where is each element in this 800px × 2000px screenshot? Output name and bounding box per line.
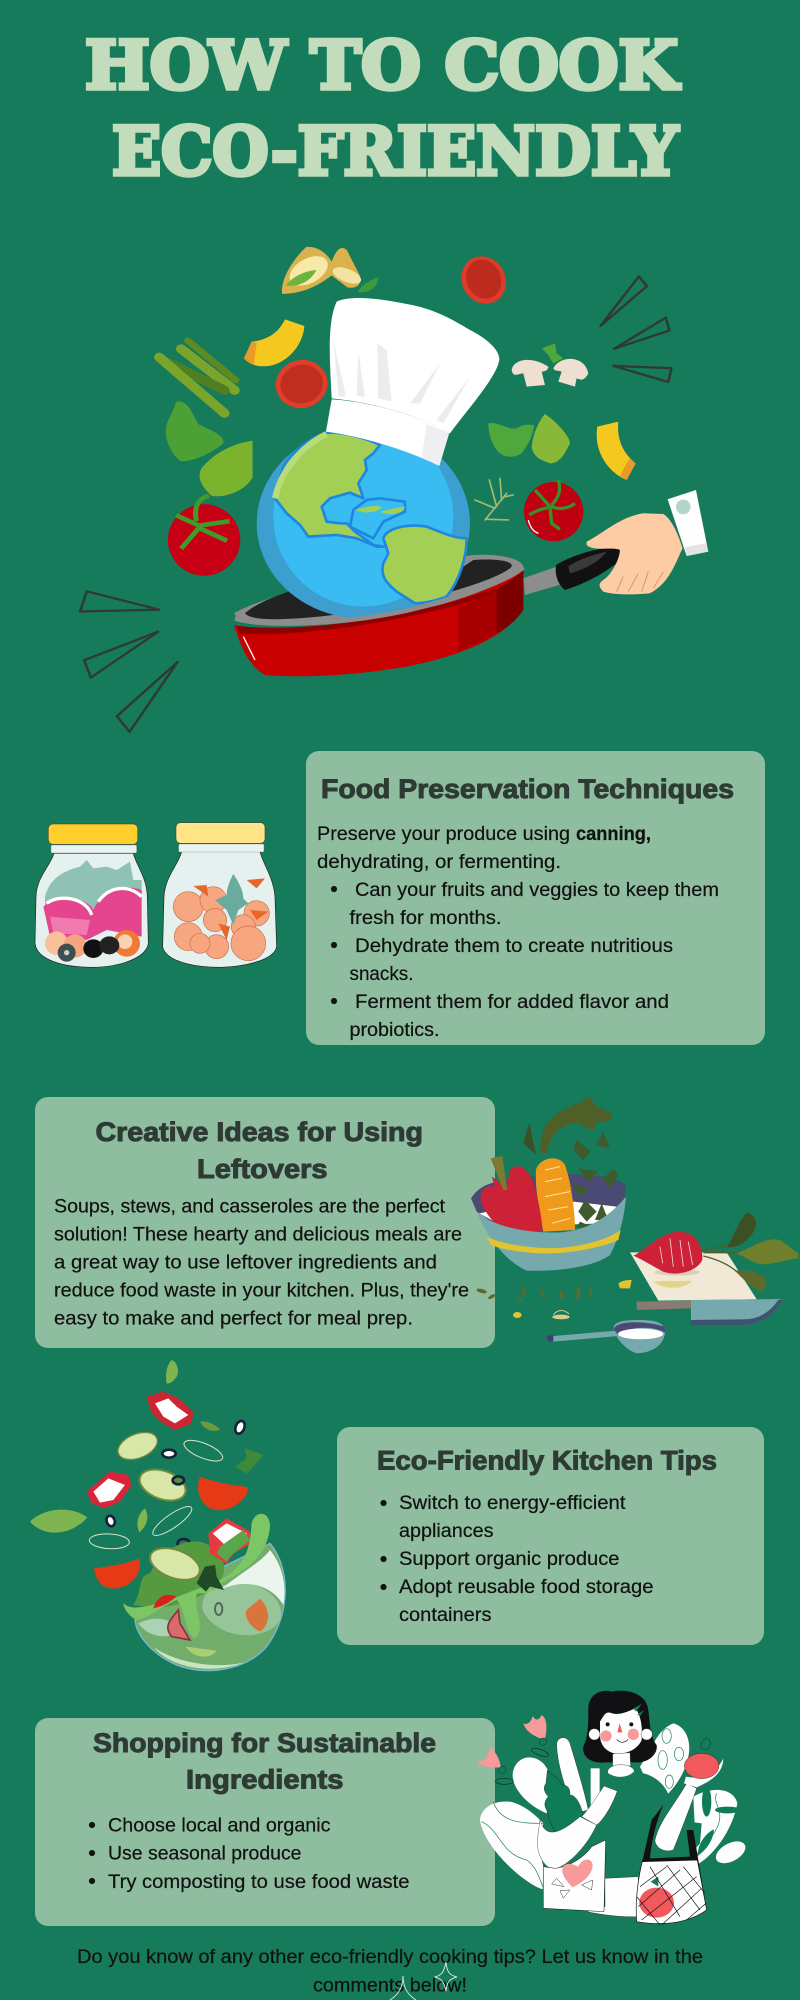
bullet list: Switch to energy-efficient	[399, 1493, 626, 1514]
illustration: falling salad bowl	[30, 1360, 285, 1671]
glass bowl	[135, 1543, 285, 1671]
panel: eco-friendly kitchen tips	[337, 1427, 764, 1645]
jar of shrimp	[163, 823, 277, 967]
flowers	[477, 1715, 549, 1784]
heading: Food Preservation Techniques	[321, 774, 734, 804]
cucumbers	[114, 1427, 190, 1506]
motion lines bottom left	[80, 591, 178, 732]
bullet list: Use seasonal produce	[108, 1844, 302, 1864]
chopping board and beet	[630, 1213, 798, 1301]
background leaves	[480, 1723, 749, 1889]
small leaves	[30, 1421, 263, 1533]
tomato slice left	[270, 354, 333, 414]
bowl with vegetables	[471, 1097, 626, 1271]
tote bag	[543, 1840, 606, 1912]
globe	[257, 427, 470, 619]
bullet list: Adopt reusable food storage	[399, 1577, 654, 1598]
panel: food preservation techniques	[306, 751, 765, 1045]
asparagus	[159, 341, 236, 413]
body text: a great way to use leftover ingredients and	[54, 1252, 437, 1274]
pan body and rim	[234, 567, 523, 676]
bullet list: containers	[399, 1605, 492, 1626]
illustration: woman with groceries	[477, 1691, 749, 1925]
body text: Preserve your produce using	[317, 824, 570, 845]
body text: Soups, stews, and casseroles are the perfect	[54, 1196, 446, 1218]
title: ECO-FRIENDLY	[112, 112, 679, 190]
illustration: preserving jars	[35, 823, 277, 967]
knife	[637, 1299, 783, 1325]
footer text	[77, 1947, 703, 1996]
footer text: Do you know of any other eco-friendly cooking tips? Let us know in the	[77, 1947, 703, 1968]
title: HOW TO COOK	[85, 26, 681, 104]
left arm	[537, 1817, 597, 1869]
body text: snacks.	[350, 964, 414, 985]
sweater body	[598, 1772, 672, 1877]
sparkle decorations	[390, 1962, 457, 2000]
heading: Creative Ideas for Using	[96, 1117, 423, 1147]
whole tomato right	[524, 480, 583, 541]
illustration: vegetable bowl and chopping board	[471, 1097, 798, 1353]
body text: easy to make and perfect for meal prep.	[54, 1308, 413, 1330]
panel background	[35, 1718, 495, 1926]
bullet list	[380, 1493, 654, 1626]
tomato wedges	[94, 1477, 248, 1588]
illustration: vegetables flying left and top of hero	[80, 247, 671, 732]
lettuce left	[166, 401, 253, 496]
heading: Eco-Friendly Kitchen Tips	[377, 1446, 717, 1476]
title	[85, 26, 681, 190]
bullet list: Try composting to use food waste	[108, 1872, 410, 1893]
pan handle	[523, 547, 620, 595]
net bag with apple	[636, 1805, 707, 1925]
body text: reduce food waste in your kitchen. Plus, they're	[54, 1280, 469, 1302]
mushrooms	[512, 343, 588, 387]
herbs scattered	[476, 1280, 632, 1319]
body text: canning,	[576, 824, 651, 845]
lettuce right	[488, 414, 570, 463]
illustration: globe in frying pan with chef hat	[234, 298, 708, 676]
bullet list: appliances	[399, 1521, 494, 1542]
body text: fresh for months.	[350, 908, 502, 929]
body text	[54, 1196, 469, 1330]
panel: creative ideas for using leftovers	[35, 1097, 495, 1348]
top leaf	[166, 1360, 178, 1383]
footer text: comments below!	[313, 1976, 467, 1996]
panel background	[35, 1097, 495, 1348]
body text	[317, 824, 719, 1041]
heading	[96, 1117, 423, 1184]
right arm with apple	[655, 1737, 740, 1857]
baguette and leaf	[544, 1738, 600, 1833]
heading	[93, 1728, 436, 1794]
hand and cuff	[587, 490, 708, 594]
whole tomato left	[168, 496, 240, 576]
measuring spoon	[546, 1320, 665, 1353]
olives	[105, 1420, 246, 1548]
bullet list: Support organic produce	[399, 1549, 620, 1570]
body text: Can your fruits and veggies to keep them	[355, 880, 719, 901]
body text: Ferment them for added flavor and	[355, 992, 669, 1013]
rosemary	[475, 478, 513, 520]
body text: probiotics.	[350, 1020, 440, 1041]
chef hat	[326, 298, 499, 466]
panel background	[306, 751, 765, 1045]
bullet list	[89, 1816, 410, 1893]
heading: Ingredients	[186, 1764, 344, 1794]
jar of vegetables	[35, 824, 148, 967]
potatoes	[282, 247, 379, 294]
hair and head	[583, 1691, 657, 1779]
lower clothing	[587, 1877, 638, 1917]
panel background	[337, 1427, 764, 1645]
panel: shopping for sustainable ingredients	[35, 1718, 495, 1926]
squash piece right	[597, 422, 636, 480]
pan back and interior	[234, 555, 523, 624]
heading: Leftovers	[197, 1154, 328, 1184]
bullet list: Choose local and organic	[108, 1816, 330, 1836]
body text: dehydrating, or fermenting.	[317, 852, 561, 873]
leaf vein lines	[482, 1729, 720, 1887]
lettuce and pepper in bowl	[123, 1514, 270, 1640]
body text: Dehydrate them to create nutritious	[355, 936, 673, 957]
tomato slice top	[456, 252, 512, 308]
onion rings	[89, 1436, 225, 1550]
bell pepper rings	[87, 1392, 193, 1508]
squash piece left	[244, 319, 304, 366]
body text: solution! These hearty and delicious meals are	[54, 1224, 462, 1246]
motion lines top right	[601, 276, 671, 382]
heading: Shopping for Sustainable	[93, 1728, 436, 1758]
